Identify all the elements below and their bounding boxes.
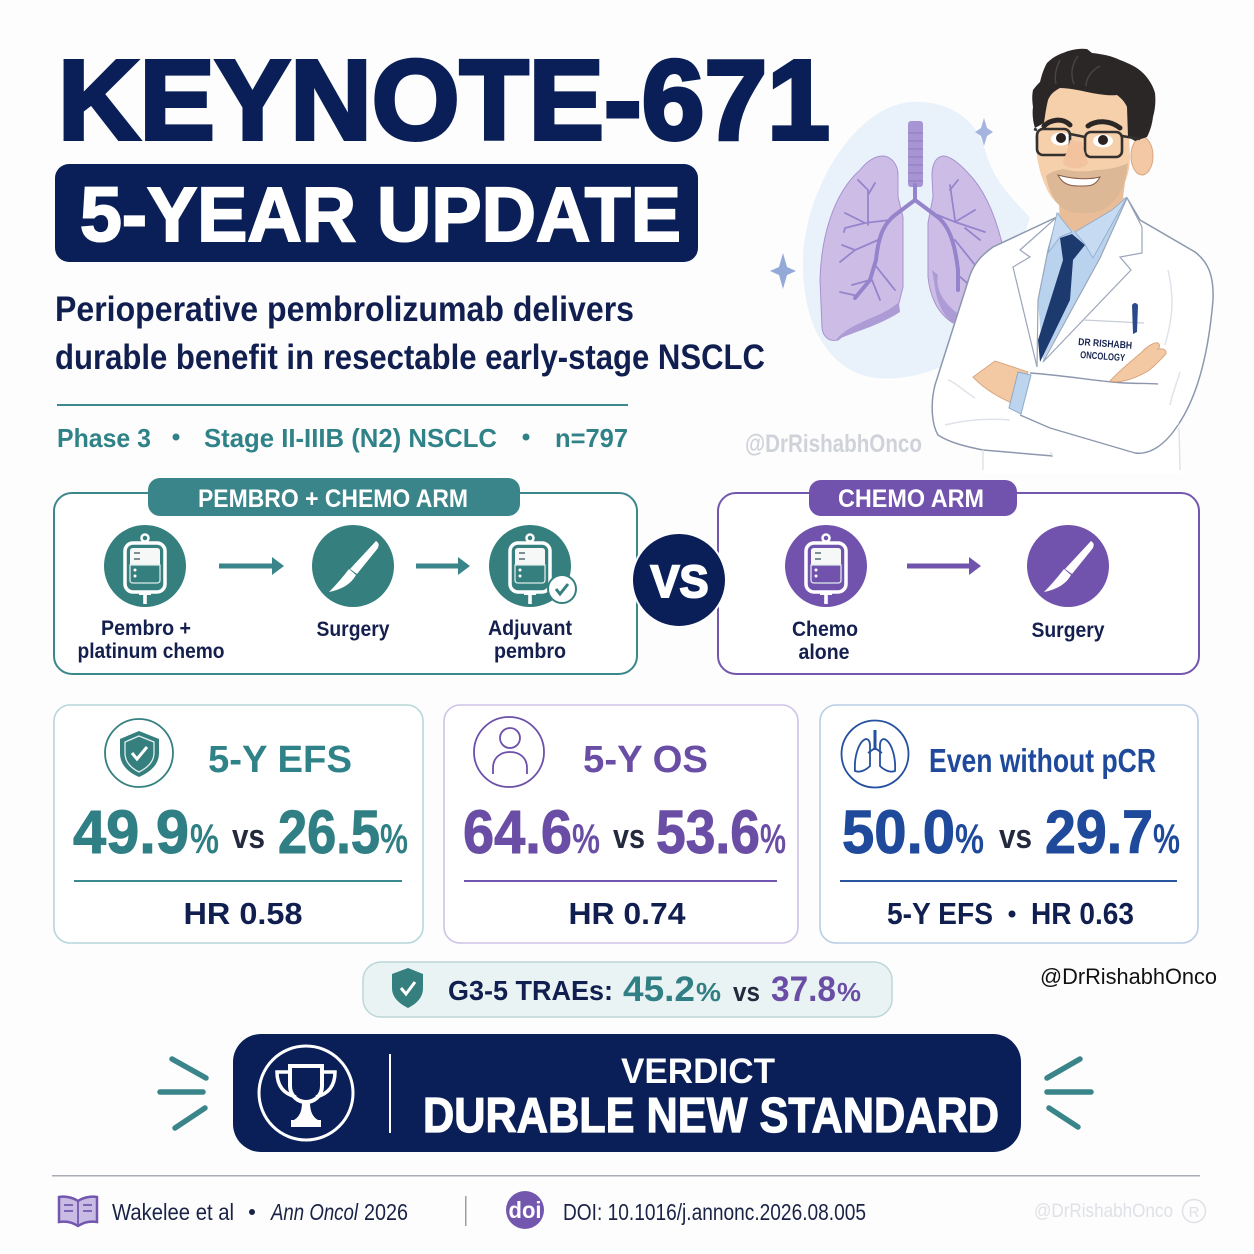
icon: IV bag: [785, 525, 867, 607]
rule: [840, 880, 1177, 882]
icon: book: [59, 1197, 97, 1226]
step label: [78, 617, 224, 663]
statistic: %: [380, 815, 408, 862]
name tag: [1078, 337, 1132, 364]
statistic: 49.9: [73, 798, 189, 866]
subtitle: Perioperative pembrolizumab delivers: [55, 290, 634, 329]
handle: @DrRishabhOnco: [1040, 964, 1217, 989]
statistic: 53.6: [656, 798, 760, 866]
heading: 5-Y OS: [583, 739, 708, 781]
panel: 5-Y EFS: [54, 705, 423, 943]
step label: Chemo: [792, 618, 858, 641]
heading: 5-Y EFS: [208, 739, 352, 781]
smile: [1058, 175, 1100, 186]
statistic: %: [955, 815, 984, 862]
citation: Ann Oncol: [269, 1199, 359, 1225]
statistic: 64.6: [463, 798, 572, 866]
safety text: %: [696, 977, 721, 1007]
statistic: %: [1153, 815, 1180, 862]
right lapel: [1043, 198, 1142, 362]
pen: [1132, 303, 1138, 334]
VS badge: [632, 533, 726, 627]
coat hem fade: [983, 428, 1180, 470]
study facts: n=797: [555, 423, 628, 453]
arrow: [219, 557, 284, 575]
statistic: [73, 798, 408, 866]
pocket: [1083, 320, 1144, 323]
icon: doi: [506, 1191, 544, 1229]
step label: Adjuvant: [488, 617, 572, 640]
coat folds: [945, 270, 1180, 425]
verdict banner: [233, 1034, 1021, 1152]
step label: alone: [798, 641, 850, 664]
rule: [464, 880, 777, 882]
left hand: [973, 361, 1028, 404]
ear: [1131, 137, 1153, 175]
name tag: ONCOLOGY: [1080, 350, 1126, 364]
safety text: [448, 970, 861, 1009]
step label: [792, 618, 858, 664]
hazard ratio: HR 0.74: [568, 896, 686, 931]
statistic: vs: [232, 818, 265, 856]
neck: [1058, 175, 1126, 232]
panel: chemo arm: [718, 480, 1199, 674]
icon: sparkle small: [975, 118, 993, 146]
arm label: PEMBRO + CHEMO ARM: [198, 485, 468, 513]
hazard ratio: HR 0.58: [184, 896, 302, 931]
icon: scalpel: [1027, 525, 1109, 607]
DOI text: DOI: 10.1016/j.annonc.2026.08.005: [563, 1199, 866, 1225]
banner: 5-year update: 5-YEAR UPDATE: [80, 172, 681, 258]
divider: [57, 404, 628, 406]
safety text: %: [837, 977, 861, 1007]
left lapel: [1013, 217, 1057, 367]
subtitle: [55, 290, 765, 377]
coat outline: [932, 198, 1213, 456]
step label: [488, 617, 572, 663]
icon: scalpel: [312, 525, 394, 607]
citation: Wakelee et al: [112, 1199, 234, 1225]
right hand: [1110, 343, 1166, 382]
statistic: 50.0: [842, 798, 955, 866]
arrow: [416, 557, 470, 575]
verdict label: VERDICT: [621, 1052, 775, 1091]
rule: [74, 880, 402, 882]
hazard ratio: [887, 896, 1134, 931]
icon: IV bag: [104, 525, 186, 607]
separator: [389, 1054, 391, 1133]
rays left: [160, 1059, 206, 1128]
study facts: [57, 423, 628, 453]
name tag: DR RISHABH: [1078, 337, 1132, 352]
statistic: vs: [613, 818, 645, 856]
illustration: lungs: [803, 102, 1030, 379]
step label: Pembro +: [101, 617, 191, 640]
face: [1035, 85, 1130, 213]
statistic: [842, 798, 1180, 866]
icon: lungs: [842, 720, 908, 788]
safety pill: G3-5 TRAEs: [363, 962, 892, 1017]
study facts: Stage II-IIIB (N2) NSCLC: [204, 423, 497, 453]
step label: pembro: [494, 640, 566, 663]
safety text: vs: [733, 977, 760, 1007]
statistic: vs: [999, 818, 1032, 856]
footer separator: [465, 1196, 466, 1226]
citation: 2026: [364, 1199, 408, 1225]
glasses: [1034, 129, 1140, 157]
verdict statement: DURABLE NEW STANDARD: [423, 1089, 999, 1143]
footer watermark: R: [1189, 1204, 1200, 1221]
arrow: [907, 557, 981, 575]
step label: Surgery: [316, 618, 390, 641]
statistic: 26.5: [278, 798, 380, 866]
icon: person: [474, 717, 544, 787]
hair: [1032, 49, 1155, 141]
study facts: Phase 3: [57, 423, 151, 453]
step label: Surgery: [1032, 619, 1105, 642]
hair shine: [1055, 56, 1100, 86]
step label: platinum chemo: [78, 640, 224, 663]
cuff: [1009, 372, 1031, 414]
icon: shield: [392, 968, 423, 1008]
arm label: [148, 478, 520, 516]
eyebrows: [1044, 120, 1120, 128]
heading: Even without pCR: [929, 742, 1156, 779]
panel: pembro + chemo arm: [54, 478, 637, 674]
statistic: 29.7: [1045, 798, 1153, 866]
arm label: CHEMO ARM: [838, 485, 984, 513]
footer watermark: @DrRishabhOnco: [1034, 1201, 1173, 1222]
panel: even without pCR: [820, 705, 1198, 943]
safety text: 45.2: [623, 970, 695, 1009]
beard shade: [1046, 163, 1128, 213]
watermark: @DrRishabhOnco: [745, 430, 922, 458]
safety text: G3-5 TRAEs:: [448, 975, 613, 1006]
citation: [112, 1199, 408, 1225]
subtitle: durable benefit in resectable early-stage NSCLC: [55, 338, 765, 377]
icon: doi: doi: [508, 1197, 542, 1223]
arm label: [809, 480, 1017, 516]
rays right: [1047, 1059, 1091, 1127]
statistic: %: [572, 815, 600, 862]
statistic: [463, 798, 786, 866]
hazard ratio: HR 0.63: [1031, 896, 1134, 931]
illustration: doctor: [932, 49, 1213, 474]
statistic: %: [190, 815, 219, 862]
icon: sparkle large: [770, 253, 796, 289]
nose: [1063, 140, 1088, 168]
forearm edge: [1020, 373, 1178, 453]
icon: trophy: [259, 1046, 353, 1140]
title: KEYNOTE-671: [58, 37, 830, 163]
VS badge: VS: [650, 556, 708, 607]
icon: IV bag with check: [489, 525, 576, 607]
shirt: [1037, 197, 1127, 360]
forearm sleeve: [1020, 373, 1185, 453]
coat body: [932, 198, 1213, 474]
tie: [1038, 234, 1085, 362]
footer rule: [52, 1175, 1200, 1176]
icon: shield: [105, 719, 173, 787]
statistic: %: [760, 815, 786, 862]
panel: 5-Y OS: [444, 705, 798, 943]
collar: [1048, 197, 1127, 258]
eyes: [1051, 132, 1113, 148]
hazard ratio: 5-Y EFS: [887, 896, 993, 931]
safety text: 37.8: [771, 970, 836, 1009]
